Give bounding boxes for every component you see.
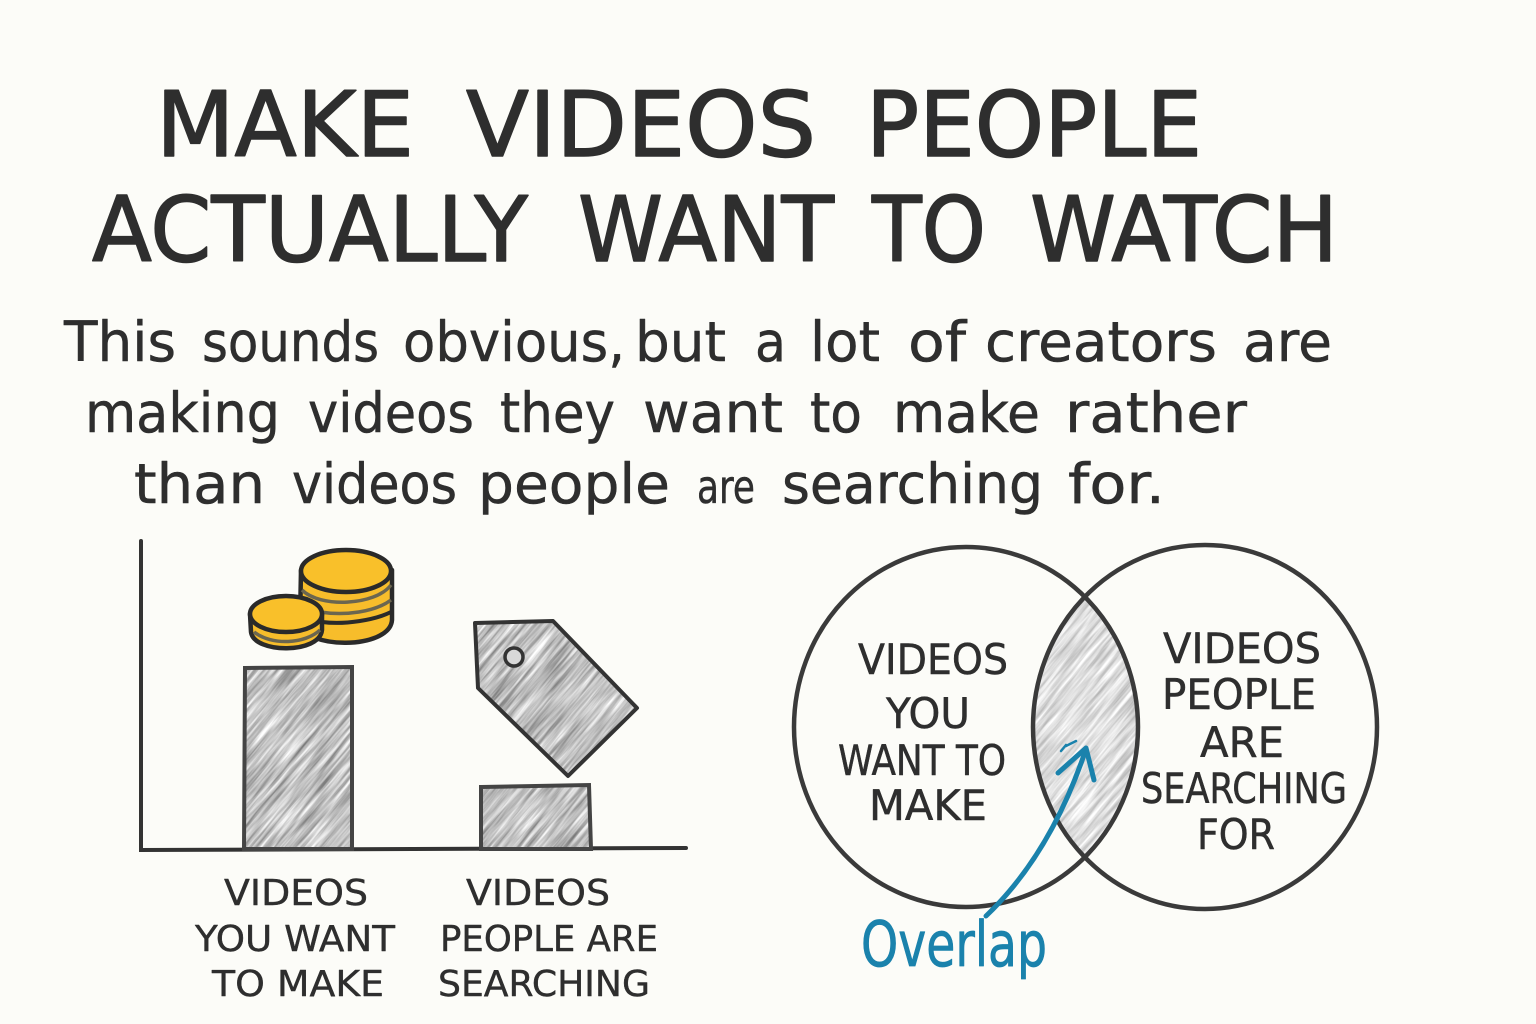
intro text: are: [1243, 310, 1332, 374]
venn diagram: [792, 542, 1380, 980]
venn right label: PEOPLE: [1162, 670, 1316, 719]
venn left label: VIDEOS: [858, 635, 1008, 684]
title: VIDEOS: [466, 73, 816, 178]
intro text: [63, 310, 1332, 516]
venn right label: FOR: [1197, 810, 1275, 859]
chart label: videos you want to make: YOU WANT: [194, 919, 396, 960]
chart label: videos you want to make: [194, 873, 396, 1005]
title: WANT: [578, 178, 835, 283]
overlap label: Overlap: [861, 908, 1047, 981]
chart label: videos you want to make: VIDEOS: [224, 873, 368, 914]
bar: videos people are searching: [479, 783, 594, 851]
venn right label: VIDEOS: [1163, 624, 1321, 673]
venn right label: SEARCHING: [1141, 764, 1347, 813]
chart label: videos people are searching: SEARCHING: [438, 964, 650, 1005]
icon: price tag: [473, 619, 640, 778]
arrow to overlap: [986, 741, 1094, 916]
intro text: people: [478, 452, 670, 516]
chart label: videos people are searching: PEOPLE ARE: [440, 919, 658, 960]
venn left label: WANT TO: [838, 736, 1006, 785]
intro text: to: [810, 381, 862, 445]
intro text: a: [755, 310, 786, 374]
intro text: searching: [782, 452, 1043, 516]
bar: videos you want to make: [242, 665, 354, 851]
intro text: lot: [810, 310, 880, 374]
title: ACTUALLY: [92, 178, 529, 283]
chart label: videos people are searching: [438, 873, 658, 1005]
venn left label: MAKE: [869, 781, 987, 830]
chart label: videos people are searching: VIDEOS: [466, 873, 610, 914]
intro text: obvious,: [403, 310, 625, 374]
intro text: are: [697, 460, 755, 514]
venn left circle: [794, 547, 1138, 907]
intro text: rather: [1065, 381, 1247, 445]
bar chart: [139, 539, 688, 997]
title: TO: [871, 178, 986, 283]
intro text: than: [134, 452, 265, 516]
title: [92, 73, 1338, 283]
title: PEOPLE: [866, 73, 1202, 178]
intro text: videos: [308, 381, 474, 445]
intro text: This: [63, 310, 176, 374]
venn right circle: [1033, 545, 1377, 909]
title: WATCH: [1030, 178, 1338, 283]
intro text: want: [643, 381, 783, 445]
intro text: sounds: [202, 310, 379, 374]
intro text: videos: [292, 452, 457, 516]
intro text: making: [85, 381, 280, 445]
intro text: make: [893, 381, 1040, 445]
intro text: of: [908, 310, 968, 374]
intro text: creators: [985, 310, 1217, 374]
venn right label: ARE: [1200, 718, 1284, 767]
intro text: they: [500, 381, 615, 445]
chart axes: [141, 541, 686, 850]
icon: gold coins: [250, 550, 392, 648]
title: MAKE: [156, 73, 414, 178]
venn right label: [1141, 624, 1347, 859]
intro text: for.: [1068, 452, 1165, 516]
chart label: videos you want to make: TO MAKE: [211, 964, 384, 1005]
venn left label: YOU: [885, 689, 970, 738]
venn left label: [838, 635, 1008, 830]
intro text: but: [635, 310, 726, 374]
venn overlap: [1035, 600, 1136, 854]
